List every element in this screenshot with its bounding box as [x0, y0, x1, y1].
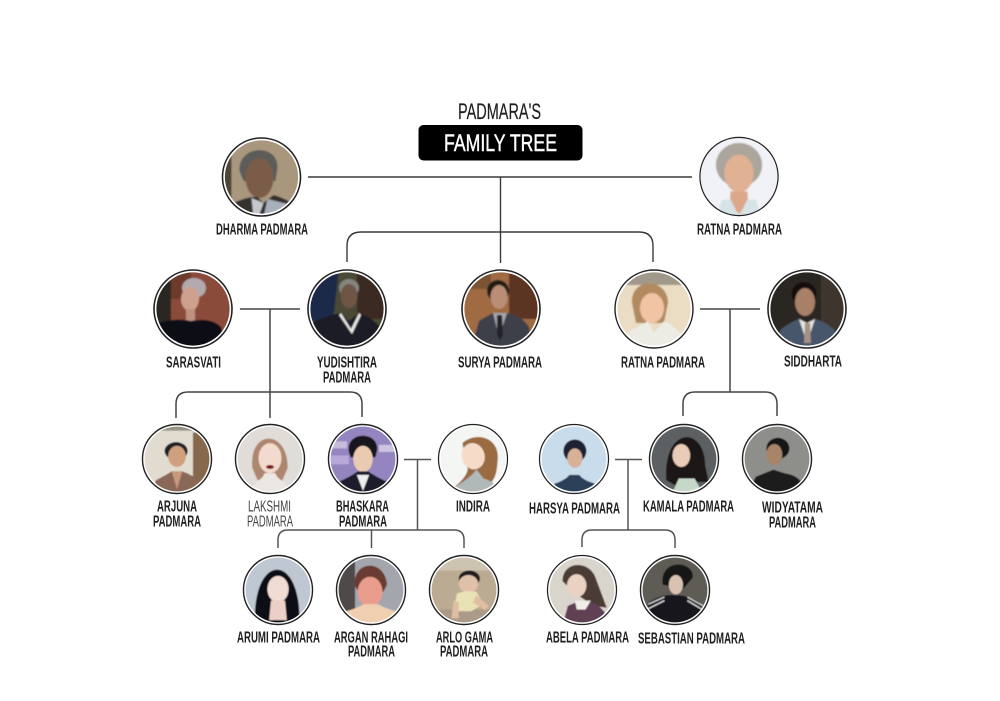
- person: Arjuna Padmara: [142, 424, 212, 530]
- person: Surya Padmara: SURYA PADMARA: [458, 354, 542, 372]
- title: [418, 99, 582, 160]
- person: Arlo Gama Padmara: ARLO GAMA: [436, 630, 493, 646]
- connector: Harsya and Kamala to children: [582, 460, 675, 548]
- person: Harsya Padmara: [529, 424, 620, 518]
- connector: first generation couple to children: [308, 177, 692, 263]
- person: Sarasvati: [153, 269, 233, 372]
- connector: Bhaskara and Indira to children: [278, 460, 464, 548]
- person: Arlo Gama Padmara: [429, 555, 499, 660]
- person: Ratna Padmara (daughter): RATNA PADMARA: [621, 354, 705, 372]
- heading: Padmara's: PADMARA'S: [458, 99, 541, 124]
- person: Lakshmi Padmara: LAKSHMI: [248, 498, 291, 516]
- person: Arlo Gama Padmara: PADMARA: [440, 644, 488, 660]
- person: Ratna Padmara (grandmother): [697, 134, 782, 238]
- heading badge: Family Tree: FAMILY TREE: [444, 130, 557, 157]
- person: Dharma Padmara: DHARMA PADMARA: [216, 222, 308, 238]
- person: Abela Padmara: ABELA PADMARA: [546, 630, 629, 646]
- person: Argan Rahagi Padmara: ARGAN RAHAGI: [334, 630, 408, 646]
- person: Yudishtira Padmara: YUDISHTIRA: [317, 354, 377, 372]
- person: Sarasvati: SARASVATI: [166, 354, 221, 372]
- person: Lakshmi Padmara: [235, 424, 305, 530]
- connector: Ratna and Siddharta to children: [683, 309, 777, 416]
- person: Ratna Padmara (grandmother): RATNA PADMARA: [697, 222, 782, 238]
- person: Kamala Padmara: KAMALA PADMARA: [643, 498, 734, 516]
- person: Dharma Padmara: [216, 137, 308, 238]
- person: Indira: [438, 424, 508, 516]
- person: Harsya Padmara: HARSYA PADMARA: [529, 500, 620, 518]
- person: Bhaskara Padmara: PADMARA: [339, 514, 387, 530]
- person: Bhaskara Padmara: BHASKARA: [336, 498, 389, 516]
- person: Lakshmi Padmara: PADMARA: [247, 514, 293, 530]
- person: Widyatama Padmara: [742, 424, 823, 532]
- person: Siddharta: [767, 269, 847, 370]
- person: Widyatama Padmara: PADMARA: [769, 514, 816, 532]
- person: Sebastian Padmara: SEBASTIAN PADMARA: [638, 630, 745, 648]
- heading badge: Family Tree: [418, 125, 582, 160]
- person: Kamala Padmara: [643, 424, 734, 516]
- person: Ratna Padmara (daughter): [614, 269, 705, 372]
- person: Indira: INDIRA: [456, 498, 490, 516]
- person: Surya Padmara: [458, 269, 542, 372]
- person: Sebastian Padmara: [638, 555, 745, 648]
- person: Arjuna Padmara: ARJUNA: [157, 498, 197, 516]
- person: Arumi Padmara: ARUMI PADMARA: [237, 630, 320, 646]
- person: Yudishtira Padmara: PADMARA: [323, 370, 371, 386]
- connector: Sarasvati and Yudishtira to children: [176, 309, 362, 418]
- person: Arjuna Padmara: PADMARA: [153, 514, 201, 530]
- person: Widyatama Padmara: WIDYATAMA: [762, 500, 823, 516]
- person: Yudishtira Padmara: [307, 269, 387, 386]
- person: Argan Rahagi Padmara: PADMARA: [348, 644, 395, 660]
- person: Siddharta: SIDDHARTA: [784, 354, 842, 370]
- person: Bhaskara Padmara: [328, 424, 398, 530]
- person: Argan Rahagi Padmara: [334, 555, 408, 660]
- person: Arumi Padmara: [237, 555, 320, 646]
- person: Abela Padmara: [546, 555, 629, 646]
